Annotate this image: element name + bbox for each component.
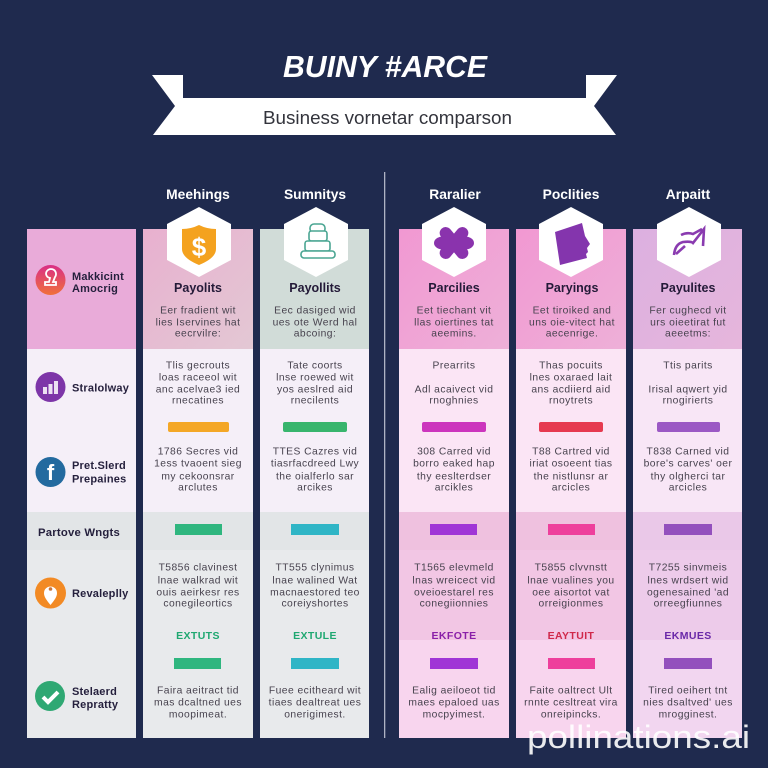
text block (156, 306, 240, 340)
text block: tiasrfacdreed Lwy (271, 458, 360, 470)
text block (529, 306, 615, 340)
text block: orreigionmes (539, 598, 603, 610)
label: first row line two: Amocrig (72, 283, 118, 295)
text block: rnecilents (291, 396, 339, 406)
text block: ouis aeirkesr res (156, 588, 240, 598)
panel: column three (399, 207, 509, 738)
text block: eecrvilre: (175, 328, 221, 340)
label: second row: Stralolway (72, 382, 130, 394)
text block (413, 446, 495, 494)
text block: 1786 Secres vid (158, 446, 238, 458)
panel: column four (516, 207, 626, 738)
text block: Eet tiechant vit (417, 306, 491, 316)
text block: moopimeat. (169, 710, 227, 720)
text block: 1ess tvaoent sieg (154, 458, 242, 470)
text block: 308 Carred vid (417, 446, 491, 458)
text block: Tlis gecrouts (166, 360, 230, 372)
tag: EKMUES (664, 630, 712, 642)
text block (156, 360, 240, 406)
subtitle: Business vornetar comparson (263, 107, 512, 128)
text block (414, 306, 494, 340)
text block: Tate coorts (287, 360, 343, 372)
text block: TT555 clynimus (276, 562, 354, 574)
text block: mocpyimest. (423, 710, 485, 720)
column heading: Paryings (546, 281, 598, 295)
text block: lnse roewed wit (276, 372, 354, 384)
text block: anc acelvae3 ied (156, 384, 240, 396)
text block: lnae walkrad wit (158, 576, 238, 586)
tag: EXTUTS (176, 630, 220, 642)
hexagon icon: dollar shield: $ (192, 232, 207, 262)
watermark: pollinations.ai (527, 719, 750, 755)
text block: Thas pocuits (539, 360, 603, 372)
text block: Eet tiroiked and (533, 306, 611, 316)
text block: T7255 sinvmeis (649, 562, 727, 574)
text block: Fuee ecitheard wit (269, 686, 361, 696)
text block (643, 686, 733, 720)
text block: aecenrige. (546, 328, 598, 340)
icon: award pin (36, 265, 66, 295)
text block: loas raceeol wit (159, 372, 237, 384)
text block: Faira aeitract tid (157, 686, 239, 696)
text block: T88 Cartred vid (532, 446, 610, 458)
text block: tiaes dealtreat ues (269, 698, 361, 708)
bar (430, 524, 477, 535)
label: fifth row: Stelaerd (72, 686, 117, 698)
text block: Tired oeihert tnt (648, 686, 728, 696)
text block: onreipincks. (541, 710, 601, 720)
tag: EKFOTE (432, 630, 476, 642)
text block: the oialferlo sar (276, 472, 354, 482)
hexagon icon: stacked tiers (284, 207, 348, 277)
bar (657, 422, 720, 432)
text block (529, 446, 613, 494)
text block (276, 360, 354, 406)
text block: conegileortics (163, 598, 233, 610)
tag: EAYTUIT (548, 630, 595, 642)
text block: TTES Cazres vid (273, 446, 357, 458)
text block: yos aeslred aid (277, 384, 353, 396)
text block (527, 562, 615, 610)
text block (270, 562, 360, 610)
text block: rnecatines (172, 396, 224, 406)
column heading: Payollits (289, 281, 341, 295)
text block: Irisal aqwert yid (648, 384, 728, 396)
bar (422, 422, 486, 432)
bar (548, 658, 595, 669)
text block (415, 360, 493, 406)
hexagon icon: purple cross (422, 207, 486, 277)
text block: lnes wrdsert wid (647, 576, 729, 586)
text block: rnoghnies (429, 396, 479, 406)
text block: T838 Carned vid (647, 446, 729, 458)
text block (154, 686, 242, 720)
icon: bar chart (36, 372, 66, 402)
center divider (384, 172, 385, 738)
text block: ues ote Werd hal (273, 318, 357, 328)
label: fifth row line two: Repratty (72, 699, 119, 711)
text block: rnnte cesltreat vira (524, 698, 618, 708)
text block (644, 446, 732, 494)
text block: mas dcaltned ues (154, 698, 242, 708)
text block: Adl acaivect vid (415, 384, 493, 396)
label: fourth row: Revaleplly (72, 588, 129, 600)
tag: EXTULE (293, 630, 337, 642)
text block: conegiionnies (420, 598, 488, 610)
text block: rnoytrets (549, 396, 593, 406)
text block (269, 686, 361, 720)
column heading: Parcilies (428, 281, 480, 295)
bar (168, 422, 229, 432)
bar (291, 658, 339, 669)
text block: lies Iservines hat (156, 318, 240, 328)
text block (156, 562, 240, 610)
text block (412, 562, 496, 610)
hexagon icon: purple trend line (657, 207, 721, 277)
text block: macnaestored teo (270, 588, 360, 598)
column headings: Arpaitt (666, 187, 711, 202)
text block: lnes oxaraed lait (530, 372, 612, 384)
text block: lnae walined Wat (272, 576, 358, 586)
text block (154, 446, 242, 494)
bar (291, 524, 339, 535)
column headings (166, 187, 711, 202)
column heading: Payulites (661, 281, 715, 295)
label: band row: Partove Wngts (38, 527, 120, 539)
column headings: Raralier (429, 187, 481, 202)
text block: maes epaloed uas (408, 698, 500, 708)
title: BUINY #ARCE (283, 49, 488, 84)
bar (283, 422, 347, 432)
text block: llas oiertines tat (414, 318, 494, 328)
text block: mrogginest. (659, 710, 717, 720)
text block: arcicles (669, 482, 707, 494)
column headings: Meehings (166, 187, 230, 202)
text block: Eer fradient wit (160, 306, 236, 316)
text block: T5856 clavinest (159, 562, 237, 574)
text block: abcoing: (294, 328, 336, 340)
bar (430, 658, 478, 669)
text block: bore's carves' oer (644, 458, 732, 470)
text block: Ealig aeiloeot tid (412, 686, 496, 696)
text block: uns oie-vitect hat (529, 318, 615, 328)
text block: rnogirierts (663, 396, 713, 406)
text block: arcikes (297, 482, 333, 494)
column headings: Poclities (543, 187, 600, 202)
hexagon icon: dollar shield (167, 207, 231, 277)
text block: thy eeslterdser (417, 472, 491, 482)
text block: urs oieetirat fut (650, 318, 726, 328)
icon: f badge: f (47, 460, 55, 485)
ribbon banner (152, 75, 617, 135)
text block: arclutes (178, 482, 218, 494)
text block (647, 562, 729, 610)
text block (648, 360, 728, 406)
text block (273, 306, 357, 340)
text block: Prearrits (433, 360, 475, 372)
bar (539, 422, 603, 432)
text block: oee aisortot vat (532, 588, 610, 598)
label: third row line two: Prepaines (72, 474, 126, 486)
bar (664, 524, 712, 535)
icon: location pin (35, 578, 66, 608)
text block: ogenesained 'ad (647, 588, 729, 598)
column headings: Sumnitys (284, 187, 346, 202)
text block: Ttis parits (663, 360, 713, 372)
panel: row labels (27, 229, 136, 738)
text block: nies dsaltved' ues (643, 698, 733, 708)
text block: lnae vualines you (527, 576, 615, 586)
text block: onerigimest. (284, 710, 346, 720)
bar (664, 658, 712, 669)
panel: column one (143, 207, 253, 738)
bar (174, 658, 221, 669)
column heading: Payolits (174, 281, 222, 295)
text block: Faite oaltrect Ult (529, 686, 613, 696)
icon: check (35, 681, 65, 711)
text block: orreegfiunnes (654, 598, 722, 610)
label: third row: Pret.Slerd (72, 460, 126, 472)
panel: column five (633, 207, 742, 738)
text block (271, 446, 360, 494)
text block: the nistlunsr ar (534, 472, 608, 482)
text block: thy olgherci tar (651, 472, 725, 482)
text block (408, 686, 500, 720)
text block: arcicles (552, 482, 590, 494)
text block: oveioestarel res (414, 588, 494, 598)
text block: aeeetms: (665, 328, 711, 340)
text block (649, 306, 727, 340)
text block: ans acdiierd aid (531, 384, 611, 396)
text block: coreiyshortes (281, 598, 349, 610)
text block: T5855 clvvnstt (535, 562, 607, 574)
label: first row: Makkicint (72, 271, 124, 283)
bar (175, 524, 222, 535)
icon: f badge (36, 457, 66, 487)
text block: borro eaked hap (413, 458, 495, 470)
panel: column two (260, 207, 369, 738)
hexagon icon: purple profile (539, 207, 603, 277)
text block: Eec dasiged wid (274, 306, 356, 316)
text block (530, 360, 612, 406)
bar (548, 524, 595, 535)
text block: my cekoonsrar (161, 472, 235, 482)
text block: iriat osoeent tias (529, 458, 613, 470)
text block: Fer cughecd vit (649, 306, 727, 316)
text block: T1565 elevmeld (414, 562, 494, 574)
text block: lnas wreicect vid (412, 576, 496, 586)
text block: arcikles (435, 482, 473, 494)
text block (524, 686, 618, 720)
text block: aeemins. (431, 328, 477, 340)
